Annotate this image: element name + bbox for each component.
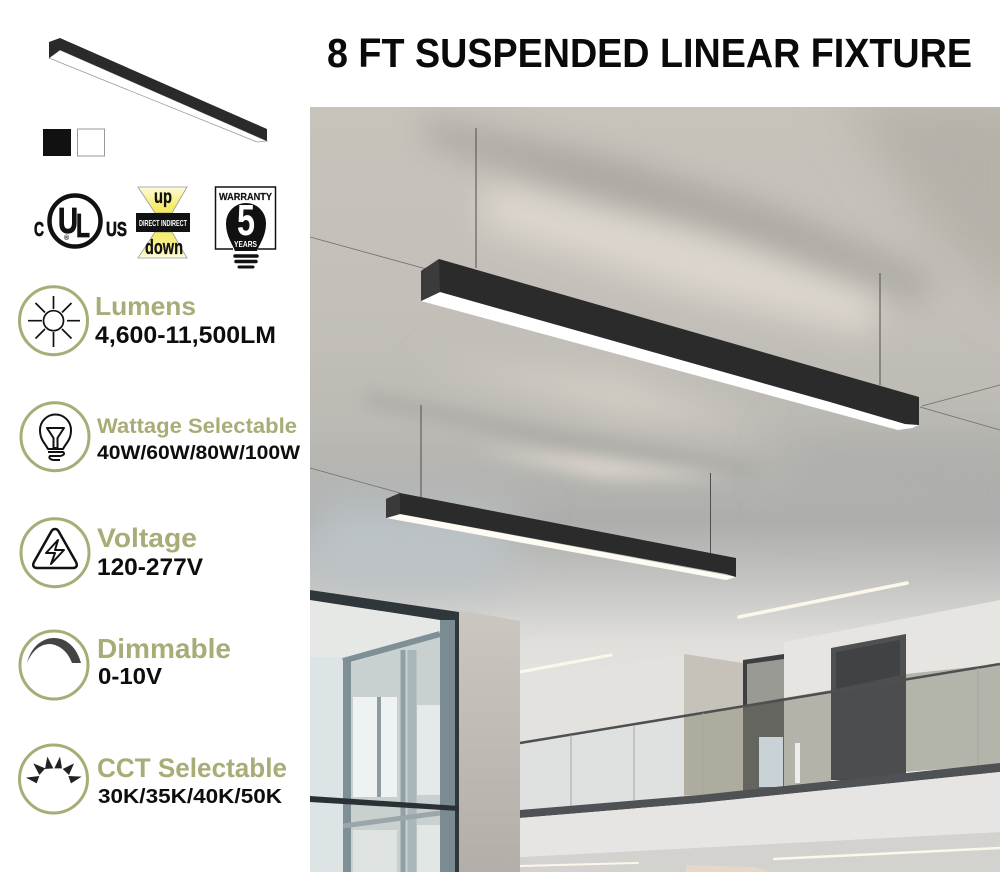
certification: cULus: C — [34, 219, 44, 241]
suspended fixture: upper — [421, 128, 919, 430]
spec: voltage: Voltage — [97, 523, 197, 553]
badge: up / down direct indirect: down — [145, 237, 183, 259]
fascia and soffit — [520, 772, 1000, 872]
badge: 5 year warranty — [216, 187, 276, 267]
glass railing — [520, 664, 1000, 818]
icon: light bulb — [21, 403, 89, 471]
pillar — [459, 610, 520, 872]
certification: cULus: U — [58, 200, 78, 241]
certification: cULus: L — [76, 207, 90, 244]
badge: up / down direct indirect — [136, 187, 190, 259]
door — [831, 634, 906, 780]
icon: hazard triangle bolt — [21, 519, 89, 587]
recessed linear lights — [520, 583, 1000, 866]
badge: 5 year warranty: YEARS — [234, 239, 257, 249]
panel: installation photo — [310, 100, 1000, 872]
spec: wattage — [21, 403, 301, 471]
window wall — [310, 590, 459, 872]
spec: wattage: Wattage Selectable — [97, 414, 297, 438]
icon: dimmer arc — [20, 631, 88, 699]
badge: 5 year warranty: 5 — [237, 196, 255, 245]
badge: up / down direct indirect: up — [154, 187, 172, 208]
ceiling — [310, 100, 1000, 697]
badge: up / down direct indirect: DIRECT INDIRECT — [139, 219, 187, 228]
spec: voltage — [21, 519, 203, 587]
suspended fixture: lower — [386, 405, 736, 580]
certification: cULus — [34, 196, 127, 246]
spec: dimmable — [20, 631, 231, 699]
icon: half sun spikes — [20, 745, 88, 813]
spec: dimmable: Dimmable — [97, 633, 231, 664]
spec: cct — [20, 745, 287, 813]
badge: 5 year warranty: WARRANTY — [219, 191, 272, 203]
product image: linear fixture — [49, 38, 267, 142]
spec: dimmable: 0-10V — [98, 663, 163, 689]
spec: lumens: 4,600-11,500LM — [95, 322, 276, 349]
certification: cULus: US — [106, 219, 127, 241]
certification: cULus: ® — [64, 234, 70, 242]
spec: cct: CCT Selectable — [97, 753, 287, 783]
spec: voltage: 120-277V — [97, 554, 203, 581]
spec: lumens — [20, 287, 276, 355]
spec: lumens: Lumens — [95, 291, 196, 321]
spec: cct: 30K/35K/40K/50K — [98, 785, 282, 808]
spec: wattage: 40W/60W/80W/100W — [97, 442, 301, 464]
mezzanine walls — [520, 600, 1000, 812]
icon: sun — [20, 287, 88, 355]
finish swatches — [43, 129, 104, 156]
